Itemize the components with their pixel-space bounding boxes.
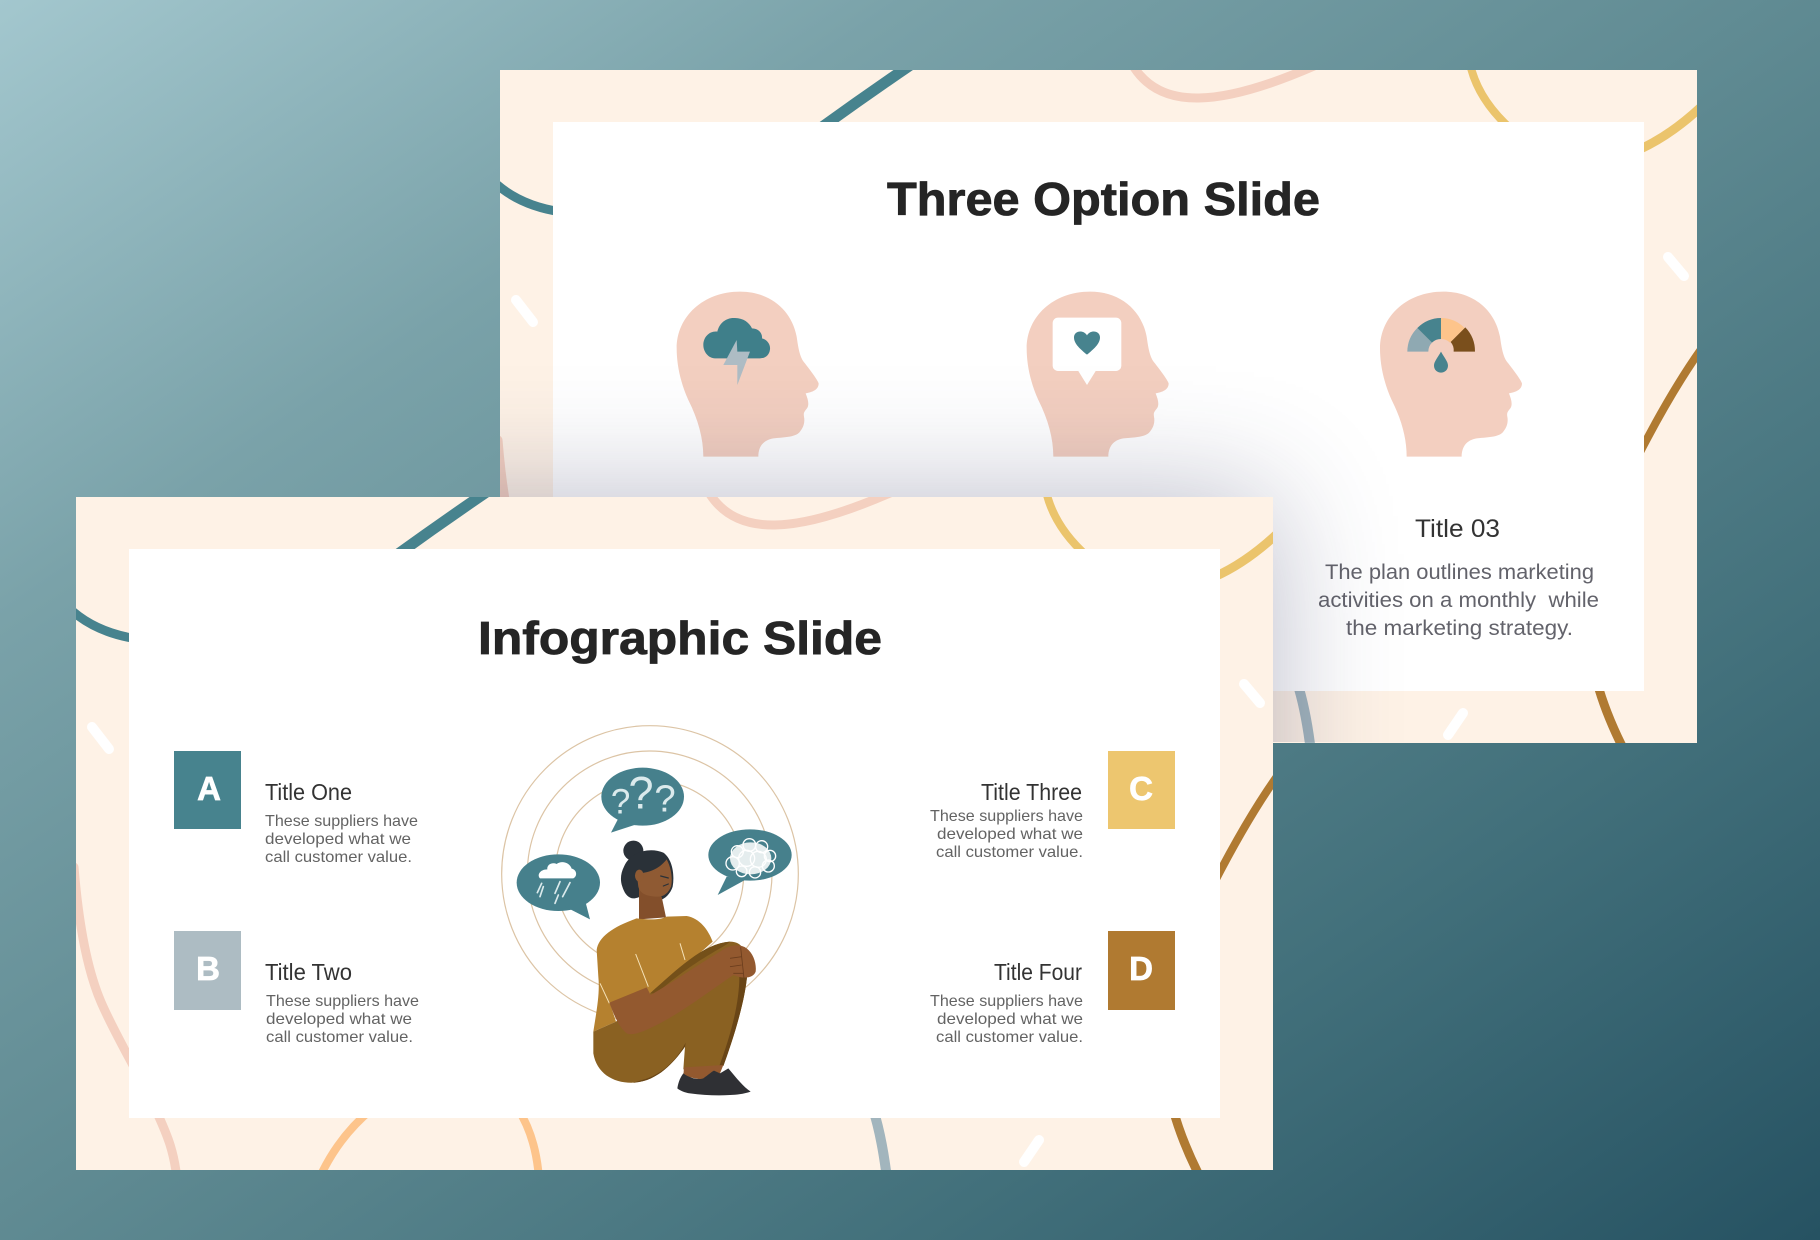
description D: call customer value.	[936, 1029, 1083, 1046]
speech bubble: tangled scribble	[708, 829, 792, 895]
description B: developed what we	[266, 1011, 412, 1028]
icon: head with storm cloud	[677, 292, 819, 457]
badge C: C	[1129, 770, 1153, 807]
description: activities on a monthly while	[1318, 589, 1599, 612]
heading: Title One: Title One	[265, 779, 352, 805]
title: Infographic Slide: Infographic Slide	[478, 612, 882, 664]
speech bubble: question marks: ?	[611, 782, 630, 821]
description A: call customer value.	[265, 849, 412, 866]
slide frame with decorative curves	[70, 491, 1278, 1179]
panel: infographic slide (front)	[70, 491, 1278, 1179]
speech bubble: question marks	[601, 767, 684, 833]
badge B	[174, 931, 241, 1010]
illustration: seated person with thought bubbles	[502, 726, 798, 1095]
description A: These suppliers have	[265, 813, 418, 830]
description A	[265, 813, 418, 866]
description D: These suppliers have	[930, 993, 1083, 1010]
description B	[266, 993, 419, 1046]
icon: head with heart speech bubble	[1027, 292, 1169, 457]
person: head and hair	[621, 841, 673, 919]
description C: These suppliers have	[930, 808, 1083, 825]
person: trousers	[593, 942, 747, 1083]
badge C	[1108, 751, 1175, 829]
badge D	[1108, 931, 1175, 1010]
description D: developed what we	[937, 1011, 1083, 1028]
person: ankle and shoes	[677, 1065, 751, 1095]
description C: developed what we	[937, 826, 1083, 843]
text block: Title 03	[1318, 515, 1599, 640]
description A: developed what we	[265, 831, 411, 848]
item D	[930, 931, 1175, 1046]
heading: Title Three: Title Three	[981, 779, 1082, 805]
speech bubble: rain cloud	[517, 854, 600, 919]
front slide shadow on back slide	[500, 426, 1344, 742]
description D	[930, 993, 1083, 1046]
item C	[930, 751, 1175, 861]
item B	[174, 931, 419, 1046]
badge A	[174, 751, 241, 829]
icon: head with gauge and tear drop	[1380, 292, 1522, 457]
concentric circles	[502, 726, 798, 1022]
slide frame with decorative curves	[494, 64, 1702, 752]
heading: Title 03: Title 03	[1415, 515, 1500, 543]
person: shirt	[593, 916, 713, 1032]
badge B: B	[196, 950, 220, 987]
badge D: D	[1129, 950, 1153, 987]
description	[1318, 561, 1599, 640]
description C: call customer value.	[936, 844, 1083, 861]
heading: Title Two: Title Two	[265, 959, 352, 985]
description B: These suppliers have	[266, 993, 419, 1010]
description C	[930, 808, 1083, 861]
panel: three option slide (back)	[494, 64, 1702, 752]
badge A: A	[197, 770, 221, 807]
person: arm and hand	[609, 945, 756, 1034]
description: The plan outlines marketing	[1325, 561, 1594, 584]
speech bubble: question marks: ?	[654, 778, 676, 821]
description: the marketing strategy.	[1346, 617, 1573, 640]
description B: call customer value.	[266, 1029, 413, 1046]
item A	[174, 751, 418, 866]
heading: Title Four: Title Four	[994, 959, 1082, 985]
title: Three Option Slide: Three Option Slide	[887, 173, 1320, 225]
speech bubble: question marks: ?	[628, 767, 654, 818]
